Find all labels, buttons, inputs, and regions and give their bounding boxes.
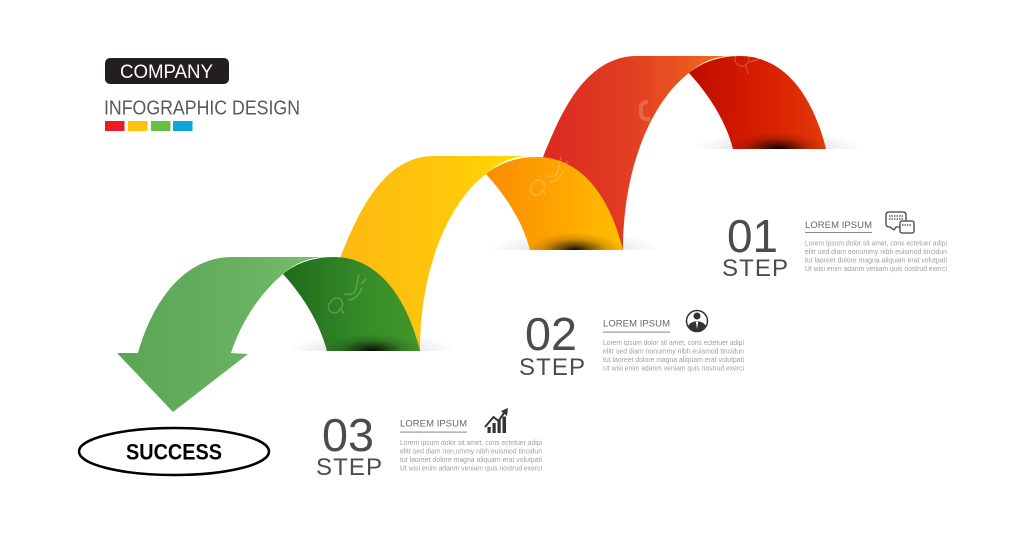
step 01: tut laoreet dolore magna aliquam erat volutpati [805,256,947,264]
step 02: Ut wisi enim adanm veniam quis nostrud exerci [603,364,744,372]
step 02: elitr sed diam nonummy nibh euismod tincidun [603,346,744,356]
step 01: Ut wisi enim adanm veniam quis nostrud exerci [805,264,947,273]
green arrow arch [117,257,458,412]
step 02: 02 [525,308,577,360]
step 01 [722,210,947,282]
icon: chat bubbles [886,212,914,233]
company badge: COMPANY [120,61,213,83]
step 03: Lorem ipsum dolor sit amet, cons ectetuer adipi [400,438,542,447]
step 03: STEP [316,454,382,481]
icon: person in circle [686,310,708,332]
infographic canvas [78,56,947,476]
step 03: 03 [322,409,374,461]
success oval: SUCCESS [126,440,222,464]
icon: growth chart [485,408,508,433]
step 02 [519,308,744,381]
step 03: elitr sed diam non,ummy nibh euismod tincidun [400,446,542,456]
step 02: LOREM IPSUM [603,318,670,330]
step 01: elitr sed diam eonummy nibh euismod tincidun [805,247,947,256]
step 01: LOREM IPSUM [805,220,872,231]
step 02: Lorem ipsum dolor sit amet, cons ectetuer adipi [603,338,744,347]
yellow arch [340,156,661,351]
step 01: STEP [722,255,788,282]
step 01: 01 [727,210,778,262]
success oval [79,428,269,475]
red arch [543,52,864,250]
step 03: LOREM IPSUM [400,418,467,430]
step 03 [316,409,542,481]
company badge [105,58,229,84]
step 02: STEP [519,354,585,381]
step 03: Ut wisi enim adanm veniam quis nostrud exerci [400,464,542,472]
step 01: Lorem ipsum dolor sit amet, cons ectetuer adipi [805,238,947,248]
step 02: tut laoreet dolore magna aliquam erat volutpati [603,355,744,364]
subtitle: INFOGRAPHIC DESIGN [104,96,300,120]
step 03: tut laoreet dolore magna aliquam erat volutpati [400,455,542,464]
colour swatches [105,121,192,131]
